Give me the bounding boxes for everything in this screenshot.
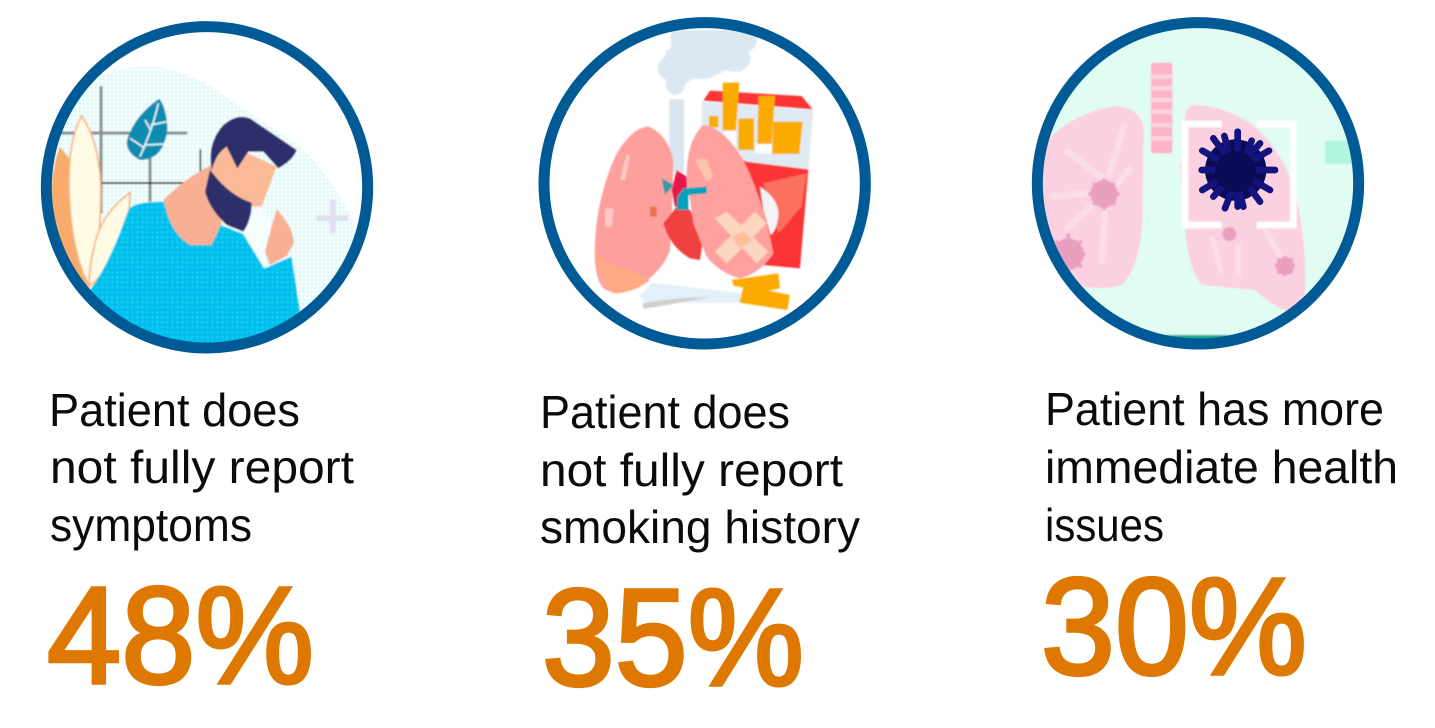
- icon: lungs and cigarettes in circle: [544, 23, 865, 344]
- faint cross: [317, 200, 348, 233]
- ring: [1037, 23, 1359, 344]
- lung highlights: [620, 153, 630, 180]
- text: symptoms label: not fully report: [50, 441, 354, 493]
- text: smoking history label: [540, 386, 860, 553]
- number: 30%: 30%: [1041, 550, 1307, 704]
- text: symptoms label: [49, 384, 354, 551]
- white collar: [243, 207, 271, 268]
- bandage: [715, 212, 768, 263]
- ring: [544, 23, 865, 344]
- left lung: [1038, 106, 1144, 288]
- text: immediate health label: immediate health: [1045, 441, 1398, 493]
- icon: man coughing in circle: [46, 27, 368, 348]
- icon: lungs with virus in circle: [1025, 10, 1375, 360]
- text: symptoms label: symptoms: [50, 499, 252, 551]
- ring: [46, 27, 368, 348]
- panel: smoking history statistic: [540, 23, 865, 715]
- trachea: [669, 99, 684, 173]
- heart top: [672, 170, 688, 210]
- text: symptoms label: Patient does: [49, 384, 300, 436]
- teal leaf: [127, 99, 167, 160]
- beard: [205, 170, 252, 232]
- mint background: [1050, 28, 1354, 336]
- hand: [265, 209, 294, 265]
- text: smoking history label: smoking history: [540, 501, 860, 553]
- left lung: [595, 127, 673, 292]
- smoke: [658, 30, 757, 95]
- right lung: [1180, 105, 1305, 310]
- trachea: [1151, 63, 1172, 153]
- text: smoking history label: not fully report: [540, 444, 843, 496]
- panel: immediate health issues statistic: [1025, 10, 1398, 704]
- text: immediate health label: Patient has more: [1045, 383, 1384, 435]
- scan brackets: [1185, 124, 1293, 225]
- cigarette pack: [737, 157, 808, 268]
- number: 35%: 35%: [542, 561, 804, 715]
- right lung: [687, 125, 773, 278]
- heart behind: [663, 207, 703, 260]
- number: 48%: 48%: [47, 559, 314, 713]
- panel: symptoms statistic: [46, 27, 368, 713]
- hair: [211, 117, 297, 170]
- text: smoking history label: Patient does: [540, 386, 790, 438]
- background halftone: [50, 66, 360, 327]
- text: immediate health label: issues: [1045, 499, 1164, 551]
- neck: [163, 165, 222, 245]
- face: [212, 143, 277, 207]
- main virus: [1202, 132, 1275, 208]
- orange leaves: [52, 147, 88, 287]
- cigarette: [640, 283, 743, 303]
- sweater: [90, 202, 300, 347]
- small virus cells: [1048, 178, 1295, 276]
- text: immediate health label: [1045, 383, 1398, 551]
